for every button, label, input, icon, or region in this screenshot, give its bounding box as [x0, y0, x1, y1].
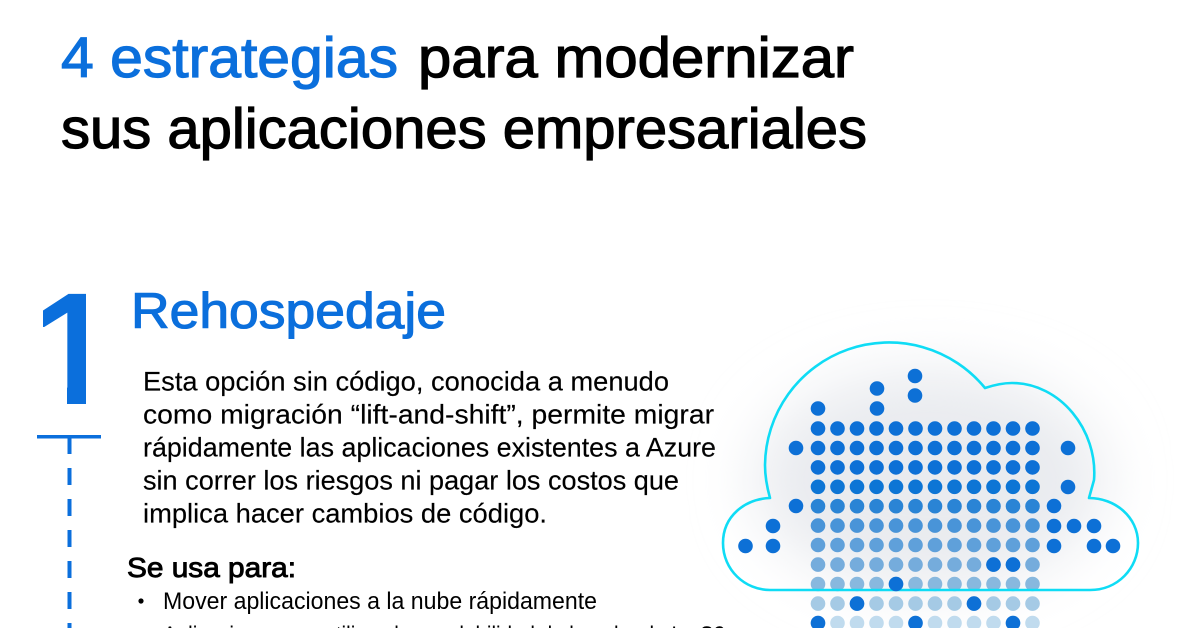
- description paragraph: como migración “lift-and-shift”, permite migrar: [143, 400, 714, 430]
- cloud soft glow: [755, 370, 1105, 590]
- description paragraph: rápidamente las aplicaciones existentes a Azure: [143, 432, 716, 462]
- subheading: Se usa para: Se usa para:: [127, 552, 296, 583]
- description paragraph: Esta opción sin código, conocida a menudo: [143, 366, 669, 396]
- bullet list: Mover aplicaciones a la nube rápidamente: [163, 588, 597, 615]
- cloud outline: [723, 342, 1138, 590]
- timeline connector: [37, 435, 101, 628]
- cloud illustration: [723, 342, 1138, 628]
- description paragraph: implica hacer cambios de código.: [143, 498, 547, 528]
- section heading: Rehospedaje: [131, 283, 446, 339]
- bullet list: [138, 588, 725, 628]
- description paragraph: sin correr los riesgos ni pagar los costos que: [143, 466, 679, 496]
- title highlight: 4 estrategias: 4 estrategias: [61, 26, 398, 90]
- title: para modernizar: para modernizar: [418, 26, 854, 90]
- title: second line: sus aplicaciones empresariales: [61, 97, 867, 161]
- description paragraph: [143, 366, 716, 528]
- big number 1: 1: [30, 259, 119, 438]
- title: [61, 26, 867, 161]
- highlighted dots: [811, 557, 1020, 628]
- dot matrix: [738, 369, 1120, 628]
